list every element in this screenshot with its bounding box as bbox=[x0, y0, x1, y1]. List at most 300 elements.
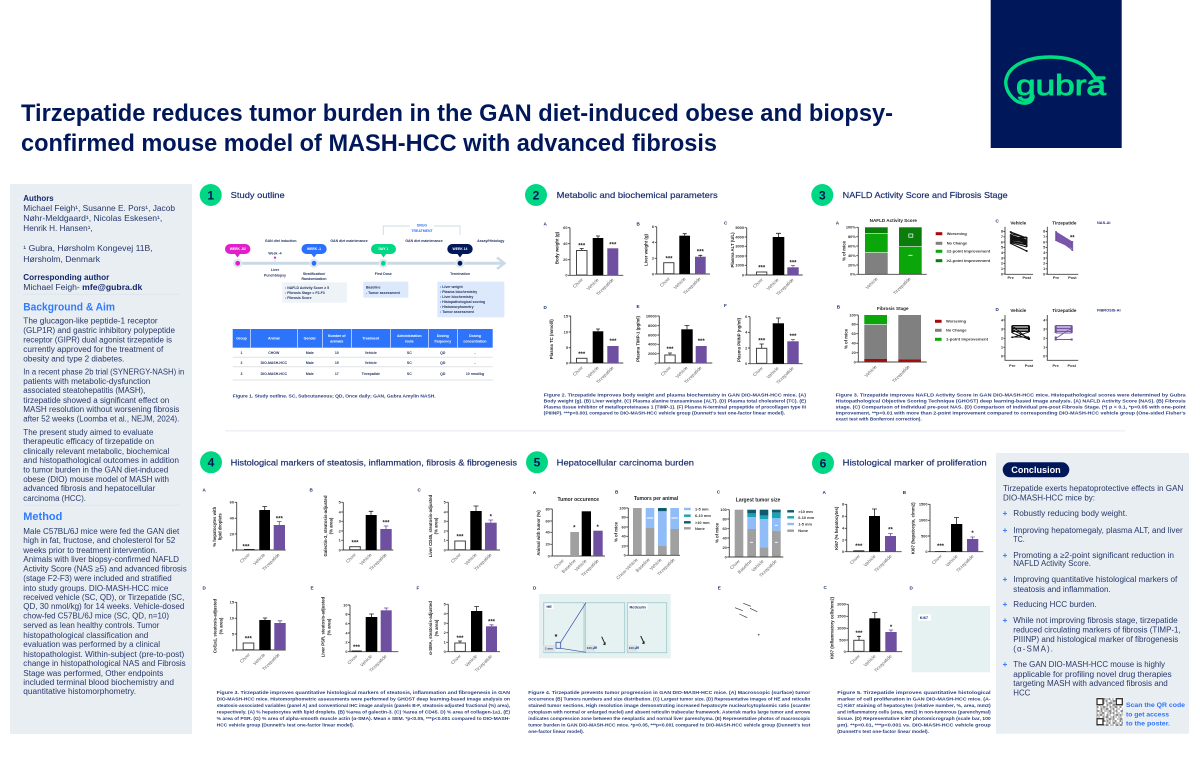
stacked bar chart: tumors per animal: 80 bbox=[621, 515, 626, 520]
line chart: individual pre-post fibrosis stage: 2 bbox=[1043, 336, 1046, 341]
legend: tumors per animal: 6-10 mm bbox=[695, 513, 711, 518]
bar chart: galectin-3: Vehicle bbox=[359, 552, 373, 566]
bar chart: body weight: 0 bbox=[565, 273, 568, 278]
line chart: individual pre-post NAS: C bbox=[996, 218, 1000, 224]
line chart: individual pre-post fibrosis stage: Pre bbox=[1053, 363, 1060, 368]
list: conclusion bullets: targeting MASH with advanced fibrosis and bbox=[1013, 679, 1168, 688]
text block: method: evaluation was performed by a clinical bbox=[23, 640, 160, 649]
stacked bar chart: largest tumor size: 100 bbox=[720, 507, 727, 512]
timeline: Stratification/ bbox=[303, 272, 325, 276]
table: study groups: QD bbox=[440, 372, 446, 376]
caption: figure 5: marker of cell proliferation in GAN DIO-MASH-HCC mice. (A- bbox=[837, 696, 991, 702]
bar chart: liver PSR: (% area) bbox=[326, 618, 332, 635]
stacked bar chart: NAFLD activity score: A bbox=[836, 220, 840, 226]
caption: figure 4: stained tumor sections. High resolution image demonstrating increased hepatocyte nuclear/cytoplasmic ratio (scanter bbox=[528, 703, 810, 709]
text block: method: (stage F2-F3) were included and stratified bbox=[23, 574, 172, 583]
bar chart: Ki67 inflammatory cells: Tirzepatide bbox=[873, 653, 893, 673]
table: study groups: Dosing bbox=[469, 334, 481, 338]
table: study groups: SC bbox=[407, 351, 412, 355]
bar chart: Ki67 hepatocyte count: *** bbox=[937, 544, 945, 550]
text block: background: receptor (GIPR) dual agonist tirzepatide is bbox=[23, 336, 172, 344]
bar chart: plasma TIMP-1: Tirzepatide bbox=[683, 365, 703, 385]
stacked bar chart: NAFLD activity score: % of mice bbox=[842, 240, 846, 261]
bar chart: hepatocytes with lipid droplets: 0 bbox=[232, 547, 234, 552]
legend: fibrosis stage: No Change bbox=[946, 328, 967, 333]
list: conclusion bullets: + bbox=[1003, 509, 1008, 518]
stacked bar chart: largest tumor size: Baseline bbox=[737, 558, 753, 575]
text block: background: obesity and type 2 diabetes. bbox=[23, 354, 124, 364]
table: study groups: concentration bbox=[463, 340, 487, 344]
legend: NAFLD activity score bbox=[936, 231, 991, 263]
bar chart: hepatocytes with lipid droplets: Vehicle bbox=[252, 552, 267, 566]
bar chart: galectin-3 bbox=[310, 488, 393, 572]
bar chart: body weight: Tirzepatide bbox=[595, 277, 615, 297]
legend: largest tumor size: >10 mm bbox=[798, 509, 813, 514]
table: study groups: Tirzepatide bbox=[362, 372, 380, 376]
bar chart: body weight: 60 bbox=[563, 225, 568, 230]
panel 4: histological markers bbox=[200, 451, 517, 728]
bar chart: Ki67 inflammatory cells: C bbox=[824, 585, 828, 590]
list: conclusion bullets: + bbox=[1003, 526, 1008, 535]
timeline: Termination bbox=[450, 272, 470, 276]
bar chart: hepatocytes with lipid droplets: *** bbox=[242, 544, 250, 550]
bar chart: plasma ALT: C bbox=[724, 220, 728, 226]
bar chart: liver weight: Tirzepatide bbox=[682, 276, 702, 296]
table: study groups: animals bbox=[330, 340, 343, 344]
caption: figure 3 bbox=[836, 392, 1186, 422]
stacked bar chart: tumors per animal: 40 bbox=[621, 534, 626, 539]
bar chart: Ki67 hepatocyte count: B bbox=[903, 490, 907, 495]
table: study groups: SC bbox=[407, 372, 412, 376]
bar chart: liver PSR: Vehicle bbox=[359, 653, 374, 668]
table: study groups: QD bbox=[440, 361, 446, 365]
caption: figure 5: C) Ki67 staining of hepatocytes (relative number, %, area, mm2) bbox=[837, 703, 991, 709]
bar chart: liver PSR: 10 bbox=[343, 602, 348, 607]
bar chart: liver CD45: 5 bbox=[444, 500, 447, 505]
text block: background: associated steatohepatitis (MASH), bbox=[23, 386, 145, 395]
bar chart: alpha-SMA: (% area) bbox=[434, 619, 439, 636]
line chart: individual pre-post NAS: 5 bbox=[1001, 245, 1004, 250]
line chart: individual pre-post NAS: 0 bbox=[1001, 271, 1003, 276]
stacked bar chart: tumors per animal: B bbox=[615, 490, 619, 494]
stacked bar chart: tumors per animal: Vehicle bbox=[649, 557, 663, 571]
bar chart: liver CD45: 1 bbox=[444, 538, 447, 543]
bar chart: Ki67 inflammatory cells: Vehicle bbox=[863, 653, 877, 668]
bar chart: body weight: 40 bbox=[563, 241, 568, 246]
icon: QR code bbox=[1096, 698, 1123, 726]
legend: NAFLD activity score: ≤2-point improvement bbox=[947, 249, 991, 254]
stacked bar chart: tumors per animal: % of mice bbox=[614, 521, 618, 542]
bar chart: tumor occurrence bbox=[533, 490, 605, 578]
bar chart: plasma TIMP-1: Plasma TIMP-1 (pg/ml) bbox=[636, 316, 640, 362]
line chart: individual pre-post NAS: NAS-AI bbox=[1097, 220, 1110, 225]
bar chart: Ki67 hepatocyte count bbox=[903, 490, 983, 573]
image panel: HE and reticulin micrographs bbox=[533, 586, 671, 658]
caption: figure 4: Figure 4. Tirzepatide prevents tumor progression in GAN DIO-MASH-HCC mice. (A) Macroscopic (surface) tumor bbox=[528, 690, 810, 696]
bar chart: Ki67 hepatocyte count: Ki67 (hepatocyte, c/mm2) bbox=[910, 502, 916, 554]
bar chart: plasma PIIINP: Tirzepatide bbox=[775, 365, 795, 385]
line chart: individual pre-post NAS bbox=[996, 218, 1110, 280]
bar chart: alpha-SMA: F bbox=[416, 586, 420, 590]
stacked bar chart: tumors per animal: 60 bbox=[621, 524, 626, 529]
bar chart: Col1a1: 15 bbox=[230, 600, 235, 605]
list: conclusion bullets: Reducing HCC burden. bbox=[1013, 600, 1097, 609]
list: conclusion bullets: NAFLD Activity Score. bbox=[1013, 559, 1091, 568]
table: study groups: Number of bbox=[328, 334, 346, 338]
stacked bar chart: fibrosis stage: 20 bbox=[851, 350, 856, 355]
text block: background: obese (DIO) mouse model of MASH with bbox=[23, 475, 169, 484]
text block: background: patients with metabolic-dysfunction bbox=[23, 377, 150, 386]
table: study groups: QD bbox=[440, 351, 446, 355]
bar chart: galectin-3: 0 bbox=[339, 547, 341, 552]
heading 1: Study outline bbox=[231, 190, 285, 200]
bar chart: alpha-SMA: 5 bbox=[444, 602, 447, 607]
line chart: individual pre-post fibrosis stage: 2 bbox=[1001, 336, 1004, 341]
bar chart: body weight: Body weight (g) bbox=[554, 231, 560, 264]
text block: background: MASH resolution without worsening fibrosis bbox=[23, 405, 179, 414]
bar chart: Col1a1 bbox=[202, 586, 286, 672]
bar chart: hepatocytes with lipid droplets: % hepatocytes with bbox=[212, 506, 217, 547]
table: study groups: - bbox=[474, 351, 476, 355]
heading 6 bbox=[812, 452, 987, 474]
stacked bar chart: NAFLD activity score: 80% bbox=[848, 234, 856, 239]
stacked bar chart: largest tumor size: % of mice bbox=[714, 522, 720, 543]
line chart: individual pre-post NAS: 6 bbox=[1001, 239, 1004, 244]
bar chart: liver CD45: Tirzepatide bbox=[473, 552, 493, 572]
bar chart: body weight: A bbox=[544, 222, 548, 226]
list: conclusion bullets: reduced circulating markers of fibrosis (TIMP-1, bbox=[1013, 626, 1181, 634]
text block: background: currently approved for the treatment of bbox=[23, 345, 164, 354]
bar chart: plasma ALT: *** bbox=[758, 266, 766, 272]
stacked bar chart: fibrosis stage: 80 bbox=[851, 322, 856, 327]
bar chart: plasma TC bbox=[544, 305, 623, 385]
bar chart: Ki67 percent hepatocytes: Vehicle bbox=[863, 553, 877, 568]
bar chart: tumor occurrence: 0 bbox=[548, 553, 550, 558]
line chart: individual pre-post NAS: 7 bbox=[1043, 234, 1045, 239]
text block: method: Animals with liver biopsy-confirmed NAFLD bbox=[23, 555, 179, 564]
panel 6: histological marker of proliferation bbox=[812, 452, 991, 735]
text block: method: Male C57BL/6J mice were fed the GAN diet bbox=[23, 527, 180, 536]
panel 1: study outline bbox=[200, 184, 504, 400]
timeline: • Histomorphometry bbox=[440, 305, 474, 309]
timeline: • Liver weight bbox=[440, 285, 463, 289]
table: study groups: 2 bbox=[241, 361, 243, 365]
legend: fibrosis stage bbox=[935, 319, 989, 342]
bar chart: body weight: Vehicle bbox=[586, 277, 600, 291]
heading 5 bbox=[526, 451, 694, 473]
legend: tumors per animal: >10 mm bbox=[695, 520, 710, 525]
heading 3: NAFLD Activity Score and Fibrosis Stage bbox=[843, 190, 1008, 200]
caption: figure 5 bbox=[837, 690, 991, 735]
stacked bar chart: fibrosis stage bbox=[837, 304, 989, 384]
bar chart: tumor occurrence: Vehicle bbox=[574, 558, 588, 572]
table: study groups: Male bbox=[306, 361, 314, 365]
line chart: individual pre-post fibrosis stage: Post bbox=[1067, 363, 1077, 368]
heading 2: Metabolic and biochemical parameters bbox=[557, 190, 718, 200]
timeline: Week -4 bbox=[268, 251, 282, 255]
caption: figure 3: Histopathological Objective Scoring Technique (GHOST) deep learning-based image analysis. (A) NAFLD Activity Score (NAS). (B) Fibrosis bbox=[836, 398, 1186, 404]
stacked bar chart: largest tumor size: Largest tumor size bbox=[736, 498, 780, 504]
bar chart: plasma PIIINP: Plasma PIIINP (ng/ml) bbox=[736, 317, 742, 362]
line chart: individual pre-post NAS: 4 bbox=[1043, 250, 1046, 255]
stacked bar chart: fibrosis stage: 40 bbox=[851, 341, 856, 346]
heading 3 bbox=[811, 184, 1008, 206]
bar chart: Ki67 hepatocyte count: * bbox=[971, 531, 974, 537]
timeline: • Fibrosis Stage = F2-F3 bbox=[285, 291, 325, 295]
timeline: DAY 1 bbox=[378, 247, 388, 251]
heading 5: 5 bbox=[534, 456, 541, 470]
bar chart: liver CD45: Liver CD45, steatosis-adjusted bbox=[428, 494, 433, 557]
bar chart: galectin-3: Tirzepatide bbox=[368, 552, 388, 572]
bar chart: plasma TC: 15 bbox=[564, 313, 569, 318]
list: conclusion bullets: Promoting a ≥2-point significant reduction in bbox=[1013, 551, 1174, 560]
text block: method: into study groups. DIO-MASH-HCC mice bbox=[23, 584, 169, 593]
bar chart: hepatocytes with lipid droplets: Chow bbox=[239, 552, 251, 564]
timeline: DRUG bbox=[417, 224, 427, 228]
table: study groups: 15 bbox=[335, 361, 339, 365]
list: conclusion bullets: steatosis and inflammation. bbox=[1013, 585, 1111, 594]
caption: figure 1: Figure 1. Study outline. SC, Subcutaneous; QD, Once daily; GAN, Gubra Amylin NASH. bbox=[233, 394, 436, 400]
bar chart: hepatocytes with lipid droplets: 40 bbox=[230, 516, 234, 521]
timeline: WEEK -52 bbox=[230, 247, 246, 251]
line chart: individual pre-post NAS: Post bbox=[1022, 275, 1032, 280]
bar chart: galectin-3: 3 bbox=[339, 519, 342, 524]
panel 2: metabolic and biochemical parameters bbox=[525, 184, 807, 416]
legend: tumors per animal bbox=[684, 506, 711, 531]
line chart: individual pre-post fibrosis stage: Tirzepatide bbox=[1052, 308, 1077, 313]
timeline: • Fibrosis Score bbox=[285, 296, 312, 300]
table: study groups: Administration bbox=[397, 334, 422, 338]
timeline: - Tumor assessment bbox=[366, 291, 401, 295]
bar chart: alpha-SMA: Vehicle bbox=[464, 653, 479, 668]
list: conclusion bullets: + bbox=[1003, 660, 1008, 669]
stacked bar chart: NAFLD activity score: 100% bbox=[846, 225, 856, 230]
stacked bar chart: NAFLD activity score: 40% bbox=[848, 253, 856, 258]
bar chart: hepatocytes with lipid droplets bbox=[202, 488, 286, 572]
text block: authors: Henrik H. Hansen¹, bbox=[23, 224, 93, 233]
bar chart: liver PSR: 0 bbox=[345, 649, 348, 654]
legend: fibrosis stage: Worsening bbox=[946, 319, 967, 324]
line chart: individual pre-post NAS: 5 bbox=[1043, 245, 1046, 250]
line chart: individual pre-post fibrosis stage: 1 bbox=[1001, 345, 1004, 350]
logo: gubra: gubra bbox=[1016, 70, 1107, 102]
timeline: • NAFLD Activity Score ≥ 5 bbox=[285, 286, 329, 290]
stacked bar chart: largest tumor size: Tirzepatide bbox=[758, 558, 778, 578]
text block: authors: Michael Feigh- mfe@gubra.dk bbox=[23, 283, 143, 292]
bar chart: hepatocytes with lipid droplets: 60 bbox=[230, 500, 234, 505]
bar chart: tumor occurrence: 20 bbox=[545, 542, 550, 547]
stacked bar chart: NAFLD activity score: Tirzepatide bbox=[892, 276, 912, 296]
line chart: individual pre-post NAS: 8 bbox=[1001, 229, 1004, 234]
stacked bar chart: largest tumor size bbox=[714, 490, 815, 578]
text block: method: histopathologist. Within-subject (pre-to-post) bbox=[23, 650, 185, 659]
bar chart: plasma ALT: Chow bbox=[752, 277, 764, 289]
table: study groups: 3 bbox=[241, 372, 243, 376]
legend: tumors per animal: None bbox=[695, 526, 706, 531]
bar chart: liver PSR bbox=[310, 586, 398, 673]
text: scan the QR code: to the poster. bbox=[1126, 720, 1170, 728]
bar chart: tumor occurrence: 80 bbox=[545, 506, 550, 511]
text block: method: Stage was performed, Other endpoints bbox=[23, 669, 163, 678]
stacked bar chart: tumors per animal bbox=[614, 490, 711, 581]
bar chart: Ki67 percent hepatocytes: 2 bbox=[842, 537, 845, 542]
table: study groups: Vehicle bbox=[365, 361, 377, 365]
bar chart: Ki67 percent hepatocytes: 8 bbox=[842, 502, 845, 507]
table: study groups: Treatment bbox=[362, 336, 380, 340]
text block: authors: Hørsholm, Denmark bbox=[23, 255, 101, 264]
caption: figure 3 histology: % area of PSR. (G) % area of alpha-smooth muscle actin (α-SMA). Mean ± SEM. *p<0.05, ***p<0.001 compared to DIO-MASH- bbox=[217, 716, 510, 722]
text block: authors: Nøhr-Meldgaard¹, Nicolas Eskesen¹, bbox=[23, 214, 162, 223]
legend: largest tumor size bbox=[787, 509, 815, 533]
line chart: individual pre-post fibrosis stage: FIBROSIS-AI bbox=[1097, 308, 1121, 313]
table: study groups: route bbox=[405, 340, 414, 344]
image panel: HE and reticulin micrographs: 1 mm bbox=[545, 646, 553, 650]
bar chart: plasma ALT: 0 bbox=[742, 272, 744, 277]
stacked bar chart: fibrosis stage: Tirzepatide bbox=[891, 364, 911, 384]
bar chart: alpha-SMA: 1 bbox=[444, 640, 447, 645]
caption: figure 4 bbox=[528, 690, 811, 735]
bar chart: plasma ALT: Tirzepatide bbox=[775, 277, 795, 297]
stacked bar chart: largest tumor size: Chow bbox=[729, 558, 741, 571]
list: conclusion bullets: The GAN DIO-MASH-HCC mouse is highly bbox=[1013, 660, 1165, 669]
bar chart: Col1a1: Col1a1, steatosis-adjusted bbox=[213, 599, 218, 653]
caption: figure 2: Figure 2. Tirzepatide improves body weight and plasma biochemistry in GAN DIO-MASH-HCC mice. (A) bbox=[544, 392, 806, 398]
heading 4: 4 bbox=[208, 456, 215, 470]
bar chart: tumor occurrence: Chow bbox=[553, 558, 565, 570]
bar chart: plasma PIIINP: 4 bbox=[745, 330, 748, 335]
bar chart: Ki67 inflammatory cells bbox=[824, 585, 902, 673]
heading: background and aim: Background & Aim bbox=[23, 302, 115, 314]
caption: figure 4: occurrence (B) Tumors numbers and size distribution. (C) Largest tumor size. (D) Representative images of HE and reticulin bbox=[528, 696, 810, 702]
stacked bar chart: NAFLD activity score bbox=[836, 218, 991, 296]
bar chart: hepatocytes with lipid droplets: 20 bbox=[230, 531, 234, 536]
image panel: HE and reticulin micrographs: * bbox=[555, 634, 558, 641]
text block: background: clinically relevant metabolic, biochemical bbox=[23, 447, 170, 456]
title: Tirzepatide reduces tumor burden in the GAN diet-induced obese and biopsy- bbox=[21, 100, 893, 127]
table: study groups: 10 bbox=[335, 351, 339, 355]
image panel: macroscopic tumor burden bbox=[718, 586, 760, 636]
table: study groups: 1 bbox=[241, 351, 243, 355]
list: conclusion bullets bbox=[1003, 509, 1183, 698]
stacked bar chart: NAFLD activity score: 60% bbox=[848, 243, 856, 248]
caption: figure 3 histology: HCC vehicle group (Dunnett's test one-factor linear model). bbox=[217, 722, 354, 728]
bar chart: Col1a1: Chow bbox=[239, 652, 251, 664]
table: study groups: frequency bbox=[434, 340, 451, 344]
caption: figure 3 histology bbox=[217, 690, 511, 728]
table: study groups: Animal bbox=[268, 336, 280, 340]
line chart: individual pre-post NAS: Vehicle bbox=[1010, 220, 1027, 226]
bar chart: Ki67 inflammatory cells: 2000 bbox=[837, 602, 846, 607]
text block: background: In a recent phase 2b trial (SYNERGY-NASH) in bbox=[23, 368, 184, 376]
timeline: TREATMENT bbox=[411, 229, 434, 233]
caption: figure 2 bbox=[544, 392, 807, 416]
bar chart: alpha-SMA: *** bbox=[456, 636, 464, 642]
bar chart: alpha-SMA: Tirzepatide bbox=[474, 653, 494, 673]
bar chart: galectin-3: 1 bbox=[339, 538, 342, 543]
bar chart: liver weight: B bbox=[636, 222, 640, 226]
timeline: WEEK 14 bbox=[453, 247, 468, 251]
legend: NAFLD activity score: ≥2-point improvement bbox=[947, 258, 991, 263]
bar chart: plasma TC: Chow bbox=[572, 365, 584, 377]
stacked bar chart: largest tumor size: 80 bbox=[722, 516, 727, 521]
stacked bar chart: fibrosis stage: % of mice bbox=[844, 328, 848, 349]
caption: figure 3: exact test with Bonferroni correction). bbox=[836, 416, 922, 422]
stacked bar chart: tumors per animal: Tumors per animal bbox=[634, 496, 679, 502]
text block: method: Activity Score (NAS ≥5) and advanced fibrosis bbox=[23, 564, 187, 574]
bar chart: liver CD45: C bbox=[418, 488, 422, 492]
bar chart: tumor occurrence: Tumor occurence bbox=[558, 497, 599, 503]
caption: figure 3: stage. (C) Comparison of individual pre-post NAS. (D) Comparison of individual pre-post Fibrosis Stage. (*) p < 0.1, *p<0.05 with one-point bbox=[836, 404, 1186, 410]
caption: figure 2: Body weight (g). (B) Liver weight. (C) Plasma alanine transaminase (ALT). (D) Plasma total cholesterol (TC). (E) bbox=[544, 398, 806, 404]
bar chart: Ki67 inflammatory cells: 500 bbox=[839, 637, 846, 642]
stacked bar chart: largest tumor size: 20 bbox=[722, 545, 727, 550]
bar chart: Ki67 inflammatory cells: 1000 bbox=[837, 626, 846, 631]
bar chart: Ki67 inflammatory cells: *** bbox=[855, 631, 863, 637]
bar chart: Col1a1: (% area) bbox=[218, 617, 224, 634]
bar chart: liver CD45: Vehicle bbox=[464, 552, 478, 566]
list: conclusion bullets: applicable for profiling novel drug therapies bbox=[1013, 670, 1172, 679]
text block: background: after 52 weeks (Loomba et al., NEJM, 2024). bbox=[23, 414, 179, 424]
text block: background: (GLP1R) and gastric inhibitory polypeptide bbox=[23, 326, 176, 335]
list: conclusion bullets: + bbox=[1003, 575, 1008, 584]
timeline: Baseline bbox=[366, 286, 380, 290]
timeline: WEEK -1 bbox=[307, 247, 321, 251]
text block: method: change in histopathological NAS and Fibrosis bbox=[23, 659, 186, 668]
table: study groups: 17 bbox=[335, 372, 339, 376]
text: scan the QR code: Scan the QR code bbox=[1126, 702, 1185, 709]
bar chart: liver PSR: 8 bbox=[345, 612, 348, 617]
heading: method: Method bbox=[23, 511, 62, 523]
caption: figure 5: tissue. (D) Representative Ki67 photomicrograph (scale bar, 100 bbox=[837, 716, 991, 722]
bar chart: hepatocytes with lipid droplets: A bbox=[202, 488, 206, 492]
text block: conclusion intro: DIO-MASH-HCC mice by: bbox=[1003, 494, 1095, 502]
bar chart: liver weight: 2 bbox=[652, 256, 655, 261]
stacked bar chart: tumors per animal: Chow-Vehicle bbox=[615, 557, 639, 581]
bar chart: Ki67 percent hepatocytes: Chow bbox=[849, 553, 861, 566]
bar chart: body weight: Chow bbox=[572, 277, 584, 289]
bar chart: Col1a1: *** bbox=[245, 636, 252, 642]
bar chart: liver weight: *** bbox=[665, 256, 673, 262]
line chart: individual pre-post NAS: 2 bbox=[1001, 261, 1004, 266]
line chart: individual pre-post NAS: Post bbox=[1068, 275, 1077, 280]
list: conclusion bullets: + bbox=[1003, 600, 1008, 609]
text block: authors: Authors bbox=[23, 194, 54, 203]
list: conclusion bullets: Improving hepatomegaly, plasma ALT, and liver bbox=[1013, 526, 1183, 535]
bar chart: liver CD45: 0 bbox=[444, 547, 446, 552]
bar chart: tumor occurrence: * bbox=[597, 525, 600, 531]
bar chart: liver CD45: *** bbox=[456, 534, 464, 540]
bar chart: Ki67 inflammatory cells: Chow bbox=[849, 653, 861, 666]
bar chart: plasma PIIINP: 0 bbox=[745, 361, 747, 366]
title: confirmed mouse model of MASH-HCC with advanced fibrosis bbox=[21, 130, 717, 157]
text block: method: quantitative histomorphometry. bbox=[23, 687, 136, 696]
bar chart: tumor occurrence: A bbox=[533, 490, 537, 495]
bar chart: liver weight: *** bbox=[697, 250, 704, 256]
timeline: First Dose bbox=[375, 272, 392, 276]
timeline bbox=[225, 224, 504, 317]
heading 5: Hepatocellular carcinoma burden bbox=[557, 458, 694, 468]
bar chart: tumor occurrence: * bbox=[573, 526, 576, 532]
line chart: individual pre-post NAS: 6 bbox=[1043, 239, 1046, 244]
bar chart: Ki67 hepatocyte count: Chow bbox=[931, 553, 943, 566]
bar chart: liver weight: Vehicle bbox=[673, 276, 687, 290]
bar chart: Ki67 percent hepatocytes: *** bbox=[855, 544, 863, 550]
text block: authors: ¹ Gubra, Hørsholm Kongevej 11B, bbox=[23, 244, 153, 253]
table: study groups bbox=[233, 329, 493, 380]
bar chart: plasma PIIINP: *** bbox=[758, 338, 766, 344]
stacked bar chart: tumors per animal: Baseline bbox=[635, 557, 651, 573]
list: conclusion bullets: Robustly reducing body weight. bbox=[1013, 509, 1127, 518]
